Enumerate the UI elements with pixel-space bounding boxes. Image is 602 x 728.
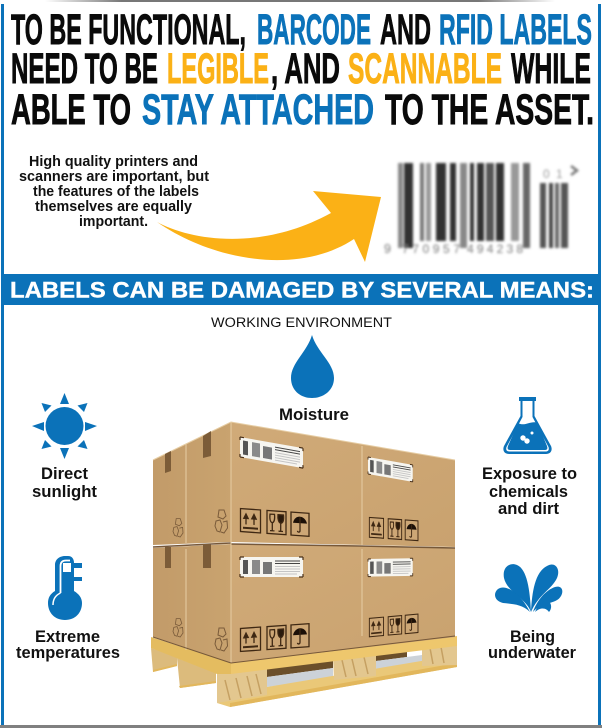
label: direct sunlight: sunlight bbox=[32, 483, 98, 501]
title bbox=[11, 6, 594, 134]
arrow bbox=[157, 191, 381, 262]
title: , AND bbox=[271, 45, 340, 93]
packing tape bbox=[165, 431, 211, 568]
title: STAY ATTACHED bbox=[142, 86, 374, 134]
icon: sun bbox=[32, 393, 97, 459]
title: TO BE FUNCTIONAL, bbox=[11, 6, 246, 54]
label: extreme temperatures bbox=[16, 628, 120, 662]
icon: water drop bbox=[291, 335, 334, 398]
label: exposure to chemicals and dirt: chemicals bbox=[489, 483, 568, 501]
heading: working environment: WORKING ENVIRONMENT bbox=[211, 315, 392, 330]
barcode: 494238 bbox=[467, 242, 523, 256]
underside shadow bbox=[267, 657, 333, 677]
text block: printers and scanners note: themselves are equally bbox=[35, 199, 192, 215]
text block: printers and scanners note: the features of the labels bbox=[33, 184, 199, 200]
title: NEED TO BE bbox=[11, 45, 158, 93]
barcode: 0 bbox=[543, 167, 550, 181]
label: being underwater: Being bbox=[510, 628, 555, 646]
recycling marks bbox=[173, 510, 228, 651]
label: extreme temperatures: Extreme bbox=[35, 628, 100, 646]
barcode bbox=[384, 163, 577, 256]
label: direct sunlight bbox=[32, 465, 98, 501]
title: LEGIBLE bbox=[167, 45, 269, 93]
barcode: 770957 bbox=[402, 242, 460, 256]
label: exposure to chemicals and dirt: Exposure to bbox=[482, 465, 577, 483]
pallet bbox=[151, 636, 457, 707]
label: exposure to chemicals and dirt bbox=[482, 465, 577, 518]
icon: thermometer bbox=[48, 556, 82, 620]
label: being underwater bbox=[488, 628, 577, 662]
right border bbox=[598, 4, 601, 725]
top deck boards bbox=[151, 637, 231, 674]
upper stack front bbox=[231, 422, 455, 547]
lower stack side bbox=[153, 544, 231, 663]
label: being underwater: underwater bbox=[488, 644, 577, 662]
lower stack front bbox=[231, 544, 455, 663]
label: extreme temperatures: temperatures bbox=[16, 644, 120, 662]
title: BARCODE bbox=[257, 6, 371, 54]
text block: printers and scanners note: scanners are important, but bbox=[19, 169, 209, 185]
handling icons bbox=[240, 509, 418, 651]
icon: chemical flask bbox=[503, 397, 552, 454]
label: direct sunlight: Direct bbox=[41, 465, 88, 483]
text block: printers and scanners note bbox=[19, 154, 209, 230]
upper stack side bbox=[153, 422, 231, 545]
text block: printers and scanners note: High quality printers and bbox=[29, 154, 198, 170]
bottom bar bbox=[0, 725, 602, 728]
bottom board bbox=[217, 655, 457, 707]
barcode: 1 bbox=[556, 167, 563, 181]
section banner: LABELS CAN BE DAMAGED BY SEVERAL MEANS: bbox=[10, 278, 594, 302]
cardboard boxes bbox=[153, 422, 455, 663]
barcode: 9 bbox=[384, 241, 391, 256]
title: AND bbox=[380, 6, 431, 54]
top shadow line bbox=[45, 0, 555, 2]
icon: water splash bbox=[495, 564, 562, 612]
shipping labels bbox=[240, 437, 413, 577]
support blocks bbox=[151, 648, 177, 672]
title: ABLE TO bbox=[11, 86, 131, 134]
label: exposure to chemicals and dirt: and dirt bbox=[498, 500, 560, 518]
left border bbox=[1, 4, 4, 725]
label: moisture: Moisture bbox=[279, 406, 349, 424]
text block: printers and scanners note: important. bbox=[79, 214, 148, 230]
